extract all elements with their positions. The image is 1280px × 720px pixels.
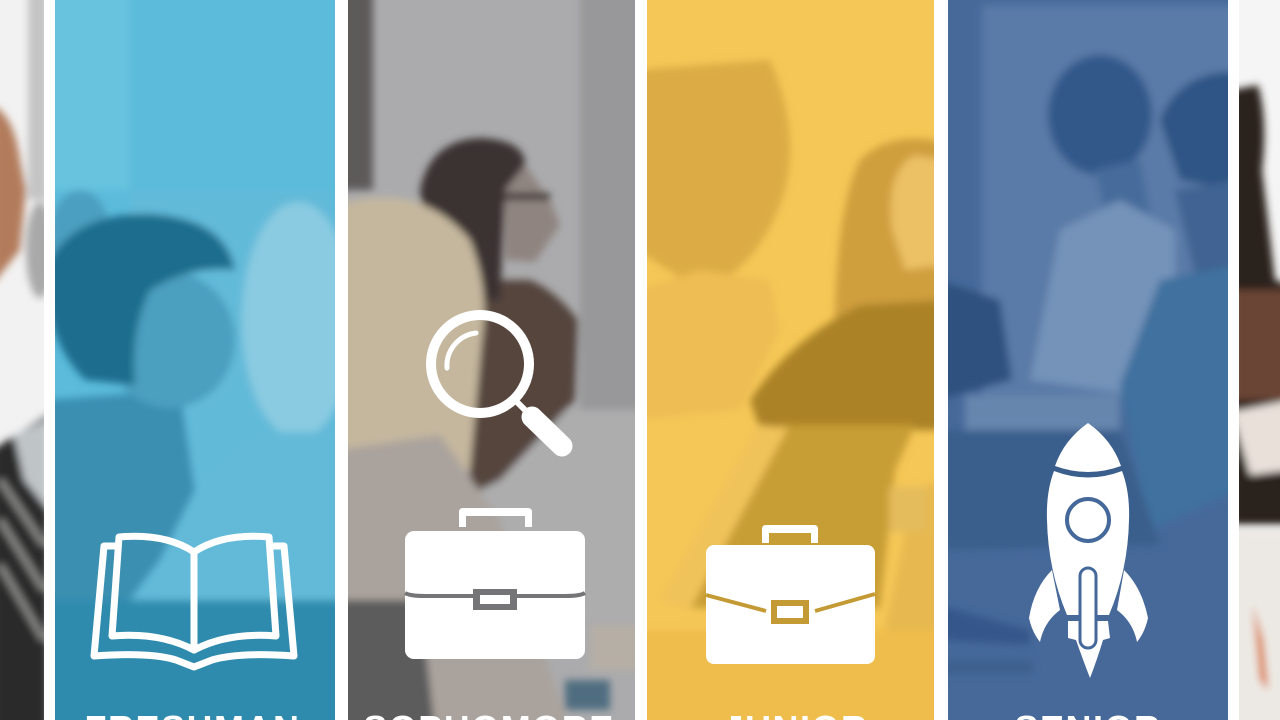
- icon: magnifying glass: [431, 315, 562, 446]
- icon: open book: [94, 536, 294, 667]
- icon: briefcase: [405, 508, 585, 659]
- panel: junior: [637, 0, 944, 720]
- panel: freshman: [45, 0, 354, 720]
- photo edge: right: [1239, 0, 1280, 720]
- sophomore photo overlay: [338, 0, 645, 720]
- junior photo overlay: [637, 0, 944, 720]
- photo edge: left: [0, 0, 44, 720]
- icon: rocket: [1029, 423, 1148, 678]
- panel: sophomore: [338, 0, 645, 720]
- panel: senior: [938, 0, 1238, 720]
- senior photo overlay: [938, 0, 1238, 720]
- freshman photo overlay: [45, 0, 354, 720]
- icon: briefcase with straps: [706, 525, 875, 664]
